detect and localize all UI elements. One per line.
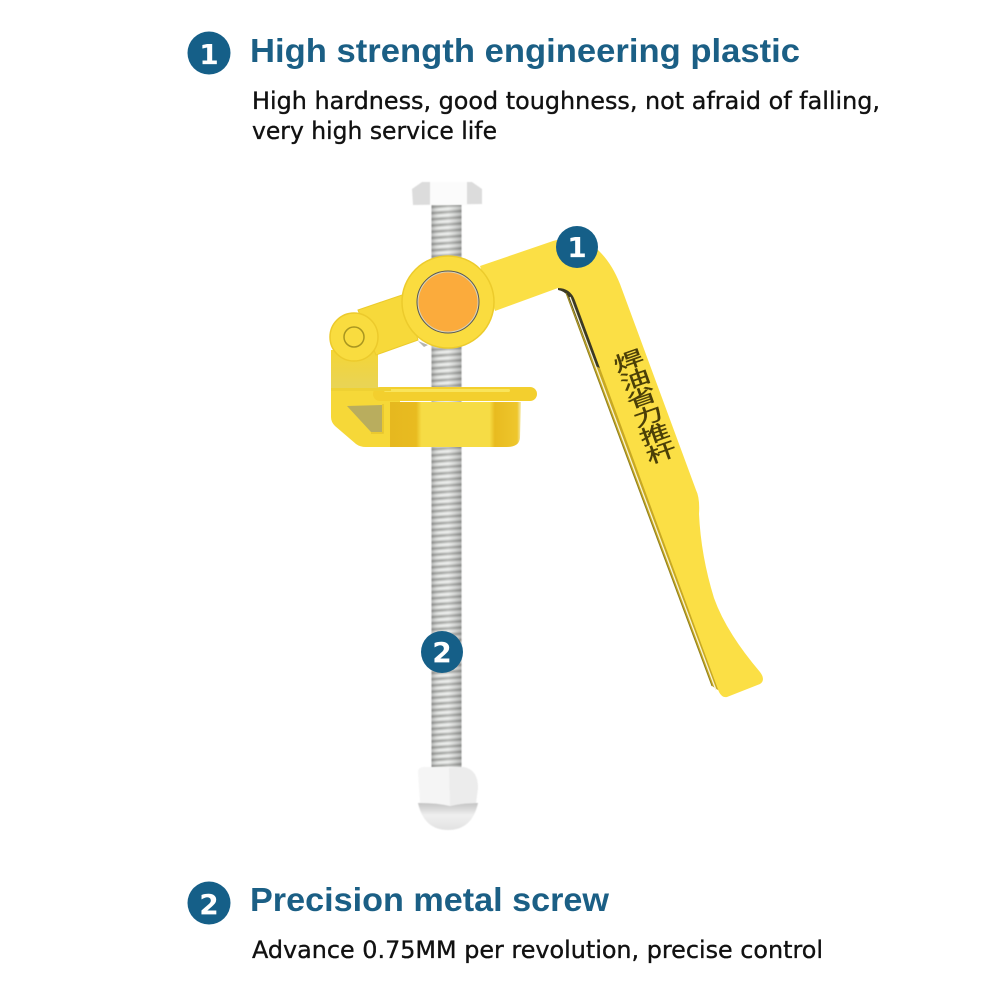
callout badge 1: 1 — [567, 231, 587, 264]
handle inscription: 油 — [617, 364, 653, 395]
handle inscription: 推 — [637, 419, 673, 450]
pivot joint — [330, 313, 378, 361]
lever handle — [480, 238, 763, 697]
left arm — [358, 294, 418, 355]
callout badge 1 — [556, 226, 598, 268]
central collar with orange button — [402, 256, 494, 348]
badge 2 — [188, 882, 230, 924]
heading block 1 — [188, 32, 880, 145]
heading: high strength engineering plastic: High strength engineering plastic — [250, 32, 800, 69]
heading block 2 — [188, 881, 823, 964]
badge 2: 2 — [199, 888, 219, 921]
yellow bracket and cup — [331, 350, 537, 447]
product illustration: lever push tool — [330, 182, 763, 830]
description text 1: High hardness, good toughness, not afraid of falling, — [252, 87, 880, 115]
callout badge 2 — [421, 631, 463, 673]
badge 1 — [188, 32, 230, 74]
description text 1 — [252, 87, 880, 145]
handle inscription: 杆 — [643, 437, 679, 469]
handle inscription — [611, 346, 679, 469]
hex bolt head — [412, 182, 482, 205]
description text 1: very high service life — [252, 117, 497, 145]
callout badge 2: 2 — [432, 636, 452, 669]
handle inscription: 力 — [630, 401, 666, 432]
heading: precision metal screw: Precision metal screw — [250, 881, 609, 918]
badge 1: 1 — [199, 38, 219, 71]
dome nut — [418, 767, 478, 830]
description text 2: Advance 0.75MM per revolution, precise control — [252, 936, 823, 964]
metal screw — [432, 204, 462, 770]
handle inscription: 焊 — [611, 346, 647, 377]
handle inscription: 省 — [624, 382, 660, 414]
